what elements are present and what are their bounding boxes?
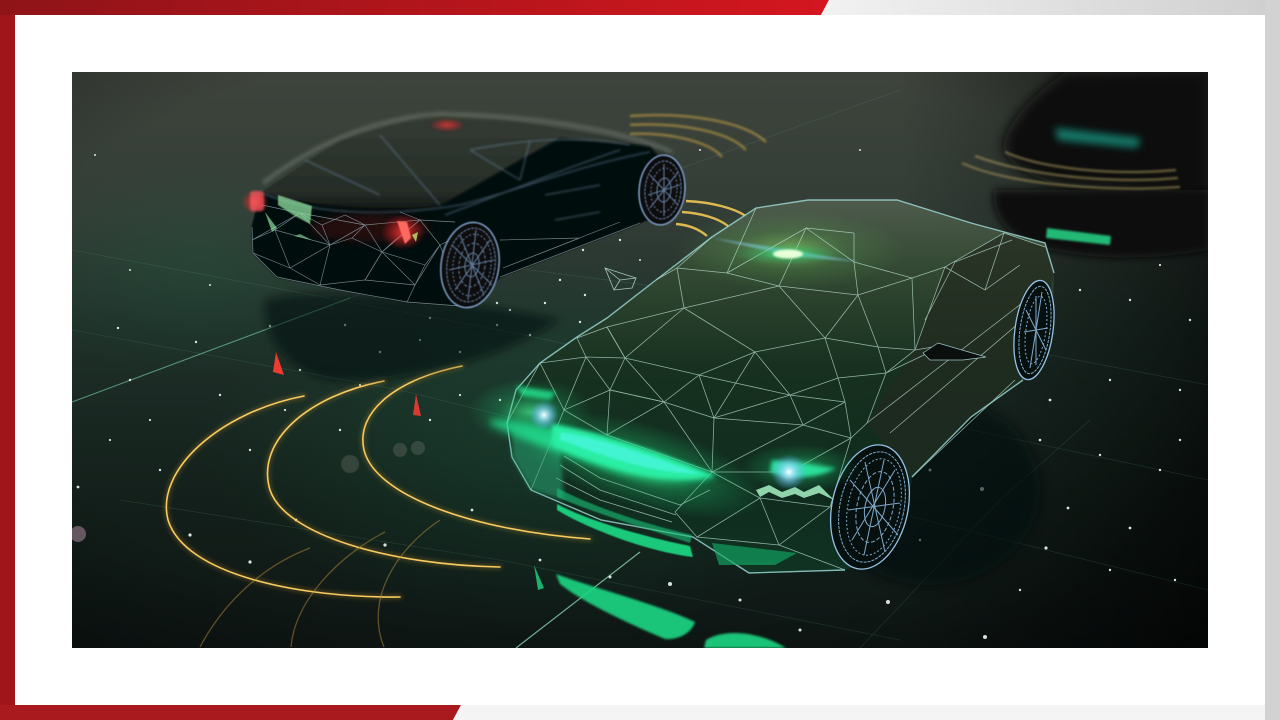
front car headlights xyxy=(529,400,559,430)
faint arc reflections xyxy=(200,520,440,647)
roof green flare xyxy=(733,243,843,265)
front car wheels xyxy=(820,278,1060,577)
frame: light bottom bar xyxy=(453,705,1265,720)
front car green light band xyxy=(490,420,716,480)
front car body xyxy=(507,200,1054,573)
far car shadow xyxy=(994,190,1208,257)
front car shadow xyxy=(872,408,1040,588)
far car arcs xyxy=(962,152,1180,189)
front car bumper green panels xyxy=(557,488,692,543)
rear car blurred roofline xyxy=(263,114,672,183)
front car blue roof streak xyxy=(712,238,860,262)
rear car body xyxy=(252,115,685,307)
main diagonal light line xyxy=(72,298,350,402)
ground dots xyxy=(77,149,1191,639)
far car xyxy=(962,72,1208,257)
frame: grey top bar xyxy=(821,0,1280,15)
front car side mirror xyxy=(923,343,986,360)
front car side shade xyxy=(867,233,1054,477)
scene background xyxy=(72,72,1208,648)
front car outline xyxy=(507,200,1054,573)
front car roof flare glow xyxy=(694,218,883,283)
rear car dark side xyxy=(252,138,682,307)
frame: red left bar xyxy=(0,0,15,720)
frame: grey right bar xyxy=(1265,0,1280,720)
yellow radar arcs, front car xyxy=(166,366,590,597)
frame: red bottom bar xyxy=(0,705,461,720)
rear car rear red tint xyxy=(310,214,430,242)
scene photo xyxy=(0,72,1208,648)
rear car green marks xyxy=(278,195,312,224)
yellow arcs, rear car xyxy=(630,115,766,157)
rear car wireframe mesh xyxy=(252,205,640,307)
rear car windows xyxy=(262,135,650,220)
rear car red lights xyxy=(241,190,269,214)
ground grid lines xyxy=(72,90,1208,648)
bokeh spots xyxy=(70,441,425,542)
rear car wheels xyxy=(435,153,688,312)
front car lower bumper glow xyxy=(512,430,564,500)
front wireframe car xyxy=(468,200,1060,577)
frame: red top bar xyxy=(0,0,829,15)
far car shadow stripe xyxy=(1046,228,1111,245)
front car green ambient glow xyxy=(503,389,777,541)
front car wireframe mesh xyxy=(507,208,1045,570)
red ground reflections xyxy=(273,352,421,416)
front car headlight marks xyxy=(756,485,834,500)
rear wireframe car xyxy=(241,114,688,312)
far car green light xyxy=(1055,128,1140,148)
green ground reflections xyxy=(534,565,786,648)
sensor box xyxy=(605,268,636,290)
rear car shadow xyxy=(265,294,560,381)
